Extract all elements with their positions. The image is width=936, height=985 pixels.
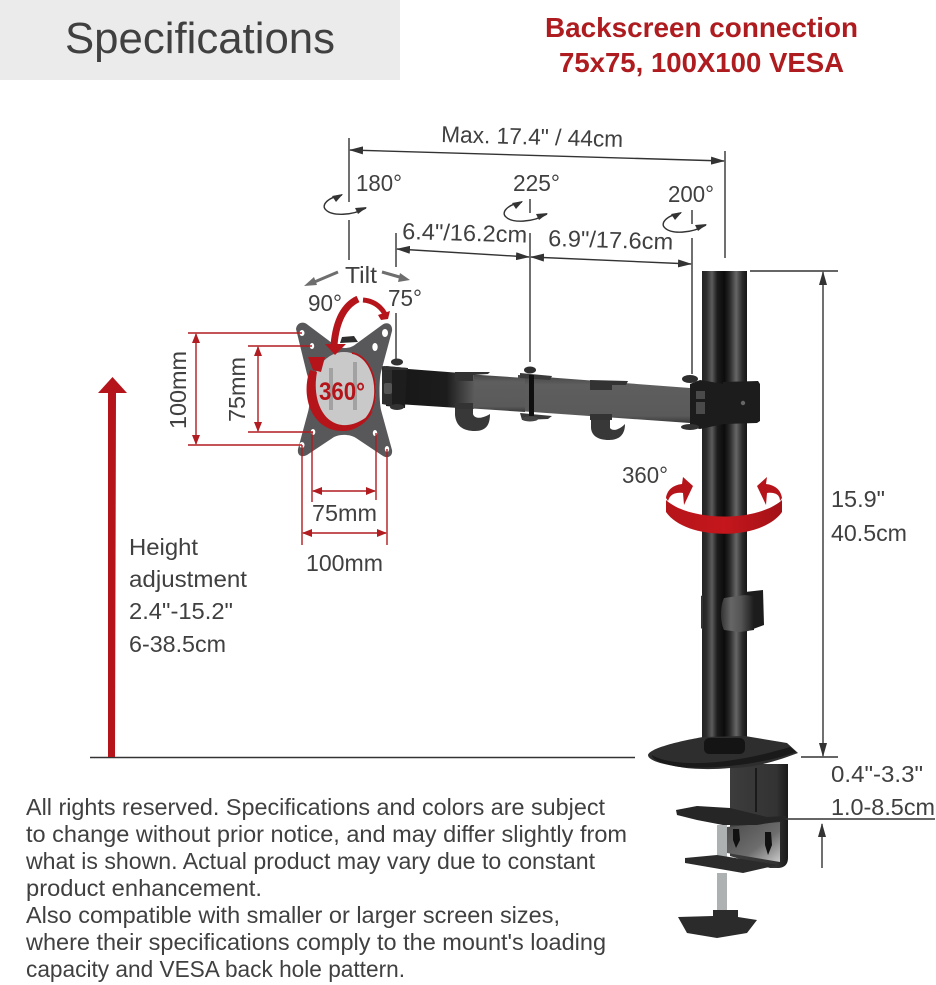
tilt label and arrows: Tilt — [345, 262, 378, 288]
clamp bracket — [727, 822, 780, 862]
label: height adjustment: 2.4"-15.2" — [129, 598, 233, 624]
rotation icon: 200 degrees — [663, 181, 714, 232]
mounting holes — [300, 329, 389, 452]
disclaimer text — [25, 794, 627, 982]
VESA plate — [296, 323, 392, 457]
disclaimer text: Also compatible with smaller or larger screen sizes, — [26, 902, 560, 928]
label: pole height: 15.9" — [831, 486, 885, 512]
disclaimer text: where their specifications comply to the mount's loading — [25, 929, 606, 955]
arm clip two — [590, 380, 628, 420]
label: 75mm horizontal: 75mm — [312, 500, 377, 526]
disclaimer text: product enhancement. — [26, 875, 262, 901]
red 360 degree pole rotation arrow — [666, 477, 782, 534]
cable hook one — [455, 403, 490, 431]
label: arm section two: 6.9"/17.6cm — [548, 225, 674, 254]
red VESA dimension lines — [188, 333, 387, 545]
screw holes — [733, 829, 772, 855]
clamp top plate — [648, 736, 798, 769]
rotation icon: 180 degrees: 180° — [356, 170, 402, 196]
arm clip one — [455, 372, 490, 409]
middle arm segment — [465, 374, 525, 412]
title: backscreen connection: Backscreen connection — [545, 12, 858, 43]
cable clip on pole — [701, 590, 764, 632]
label: height adjustment: Height — [129, 534, 199, 560]
clamp lower jaw — [676, 806, 786, 825]
clamp body — [730, 764, 788, 868]
monitor arm — [382, 358, 690, 440]
label: height adjustment — [129, 534, 248, 657]
disclaimer text: to change without prior notice, and may differ slightly from — [26, 821, 627, 847]
clamp knob — [678, 910, 757, 938]
label: arm section one: 6.4"/16.2cm — [402, 218, 528, 247]
height baseline — [90, 756, 635, 758]
rear arm segment — [518, 375, 690, 423]
title: backscreen connection: 75x75, 100X100 VESA — [559, 47, 844, 78]
tilt label and arrows — [304, 262, 422, 316]
label: clamp range: 0.4"-3.3" — [831, 761, 923, 787]
threaded screw — [717, 825, 727, 910]
red tilt and rotate arrows — [307, 299, 390, 431]
label: 100mm vertical: 100mm — [165, 351, 191, 429]
plate bolt — [340, 336, 358, 343]
heading: Specifications: Specifications — [65, 14, 335, 63]
label: clamp range: 1.0-8.5cm — [831, 794, 935, 820]
label: max reach: Max. 17.4" / 44cm — [441, 121, 624, 152]
rotation icon: 225 degrees — [504, 170, 560, 221]
centre disc — [312, 352, 376, 430]
joint front — [386, 366, 407, 408]
label: pole height — [831, 486, 907, 546]
label: 100mm horizontal: 100mm — [306, 550, 383, 576]
label: clamp range — [831, 761, 935, 820]
pole collar — [723, 381, 760, 424]
label: 360 degrees: 360° — [622, 462, 668, 488]
desk clamp — [648, 736, 798, 938]
reach dimension lines — [349, 138, 725, 374]
cable hook two — [591, 420, 625, 440]
disclaimer text: All rights reserved. Specifications and colors are subject — [26, 794, 606, 820]
disclaimer text: what is shown. Actual product may vary due to constant — [25, 848, 596, 874]
front arm segment — [382, 367, 474, 409]
heading: Specifications — [0, 0, 400, 80]
disclaimer text: capacity and VESA back hole pattern. — [26, 956, 405, 982]
red tilt and rotate arrows: 360° — [319, 378, 365, 406]
height adjustment arrow — [98, 377, 127, 757]
label: 75mm vertical: 75mm — [224, 357, 250, 422]
label: height adjustment: adjustment — [129, 566, 248, 592]
tilt label and arrows: 75° — [388, 285, 422, 311]
label: height adjustment: 6-38.5cm — [129, 631, 226, 657]
joint middle — [520, 373, 552, 420]
pole — [681, 271, 764, 755]
clamp base plate — [685, 855, 778, 873]
rotation icon: 180 degrees — [324, 170, 402, 214]
tilt label and arrows: 90° — [308, 290, 342, 316]
arm pole bracket — [690, 380, 724, 429]
title: backscreen connection — [545, 12, 858, 78]
rotation icon: 200 degrees: 200° — [668, 181, 714, 207]
rotation icon: 225 degrees: 225° — [513, 170, 560, 196]
label: pole height: 40.5cm — [831, 520, 907, 546]
vertical height dimensions — [750, 271, 935, 868]
